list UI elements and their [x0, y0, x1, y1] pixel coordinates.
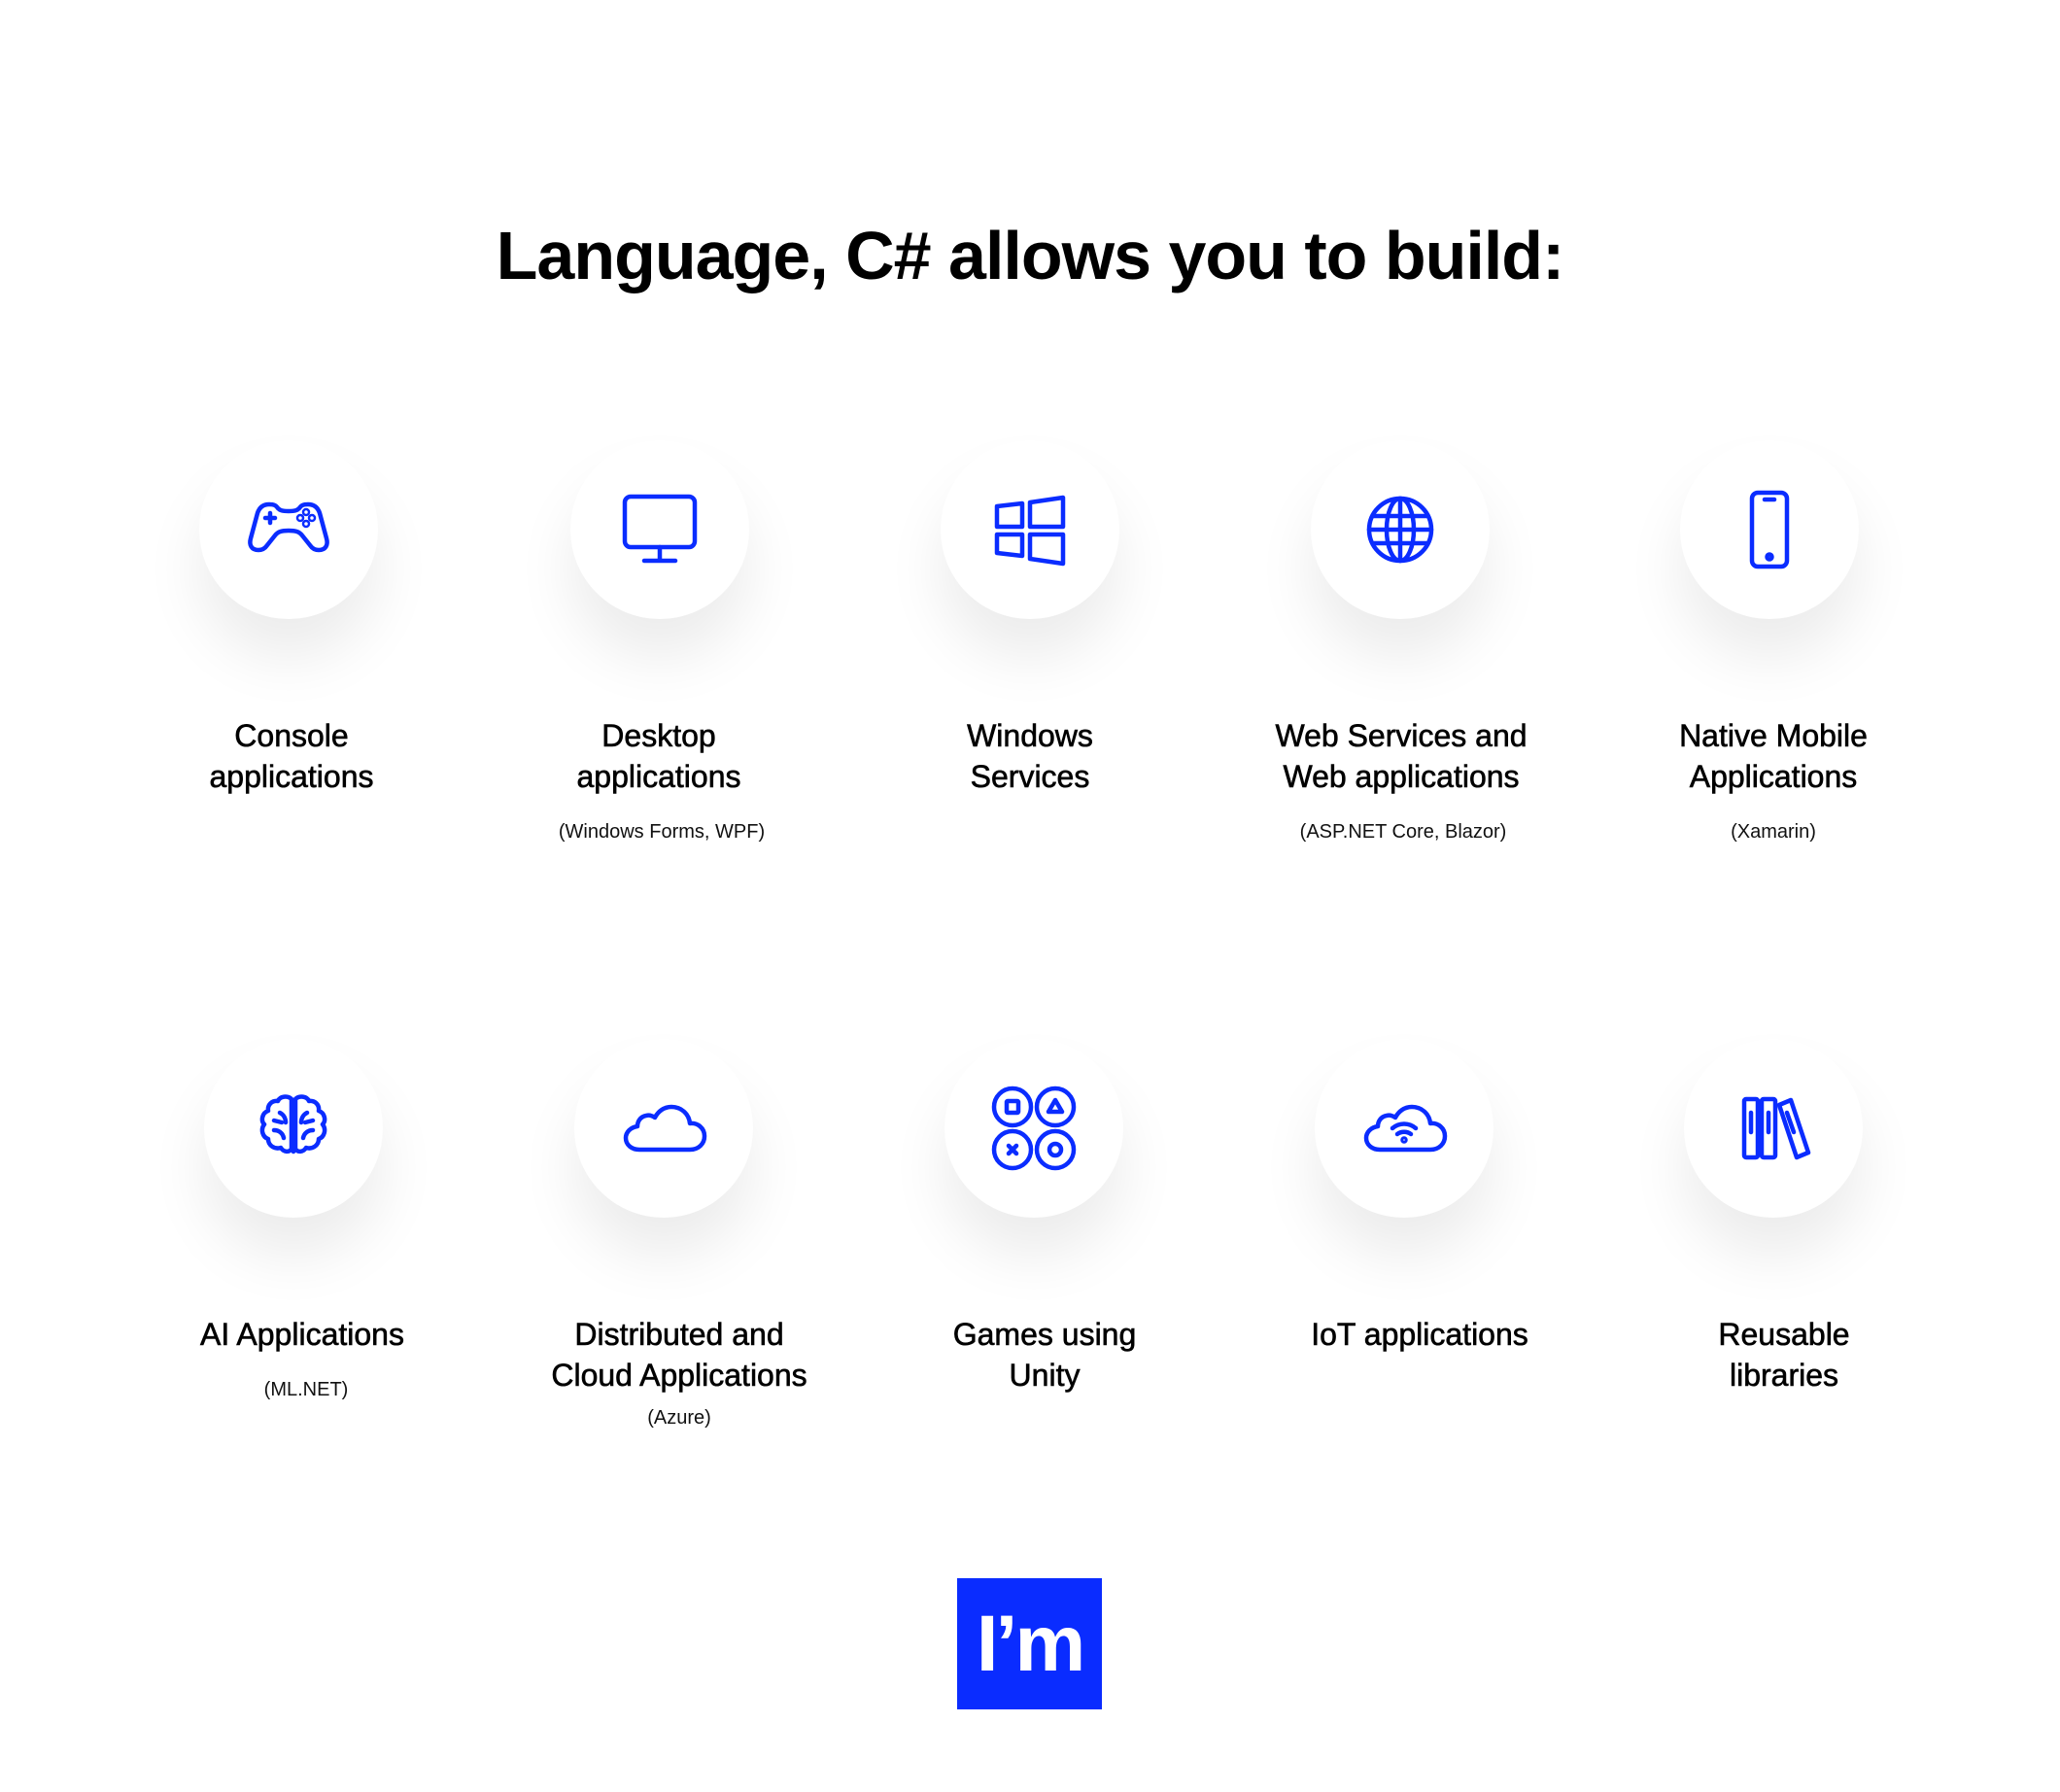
label: windows services: Services — [971, 759, 1089, 794]
icon: iot cloud — [1315, 1039, 1494, 1218]
label: web — [1275, 718, 1528, 794]
label: desktop: applications — [577, 759, 740, 794]
label: distributed: Cloud Applications — [551, 1358, 807, 1393]
label: web: Web applications — [1283, 759, 1520, 794]
icon: windows — [941, 440, 1119, 619]
icon: brain — [204, 1039, 383, 1218]
label: console: Console — [234, 718, 349, 753]
icon: cloud — [574, 1039, 753, 1218]
title: Language, C# allows you to build: — [497, 218, 1563, 293]
label: mobile: Applications — [1690, 759, 1857, 794]
label: windows services — [966, 718, 1093, 794]
sub: distributed: (Azure) — [647, 1407, 711, 1429]
label: reusable: Reusable — [1718, 1317, 1850, 1352]
label: distributed — [551, 1317, 807, 1393]
label: desktop: Desktop — [601, 718, 716, 753]
icon: game buttons — [944, 1039, 1123, 1218]
icon: books — [1684, 1039, 1863, 1218]
label: console: applications — [210, 759, 373, 794]
logo — [957, 1578, 1102, 1709]
icon: phone — [1680, 440, 1859, 619]
label: web: Web Services and — [1275, 718, 1528, 753]
label: mobile — [1679, 718, 1868, 794]
icon: gamepad — [199, 440, 378, 619]
sub: mobile: (Xamarin) — [1731, 821, 1816, 843]
icon: globe — [1311, 440, 1490, 619]
sub: AI: (ML.NET) — [264, 1379, 348, 1400]
logo: I’m — [977, 1600, 1082, 1687]
sub: web: (ASP.NET Core, Blazor) — [1300, 821, 1506, 843]
label: reusable: libraries — [1730, 1358, 1838, 1393]
sub: desktop: (Windows Forms, WPF) — [559, 821, 765, 843]
label: AI: AI Applications — [200, 1317, 404, 1352]
icon: monitor — [570, 440, 749, 619]
label: games: Games using — [953, 1317, 1136, 1352]
label: desktop — [577, 718, 740, 794]
label: games: Unity — [1010, 1358, 1080, 1393]
label: mobile: Native Mobile — [1679, 718, 1868, 753]
label: iot: IoT applications — [1311, 1317, 1528, 1352]
label: reusable — [1718, 1317, 1850, 1393]
label: console — [210, 718, 373, 794]
label: windows services: Windows — [967, 718, 1093, 753]
label: games — [953, 1317, 1136, 1393]
label: distributed: Distributed and — [574, 1317, 784, 1352]
